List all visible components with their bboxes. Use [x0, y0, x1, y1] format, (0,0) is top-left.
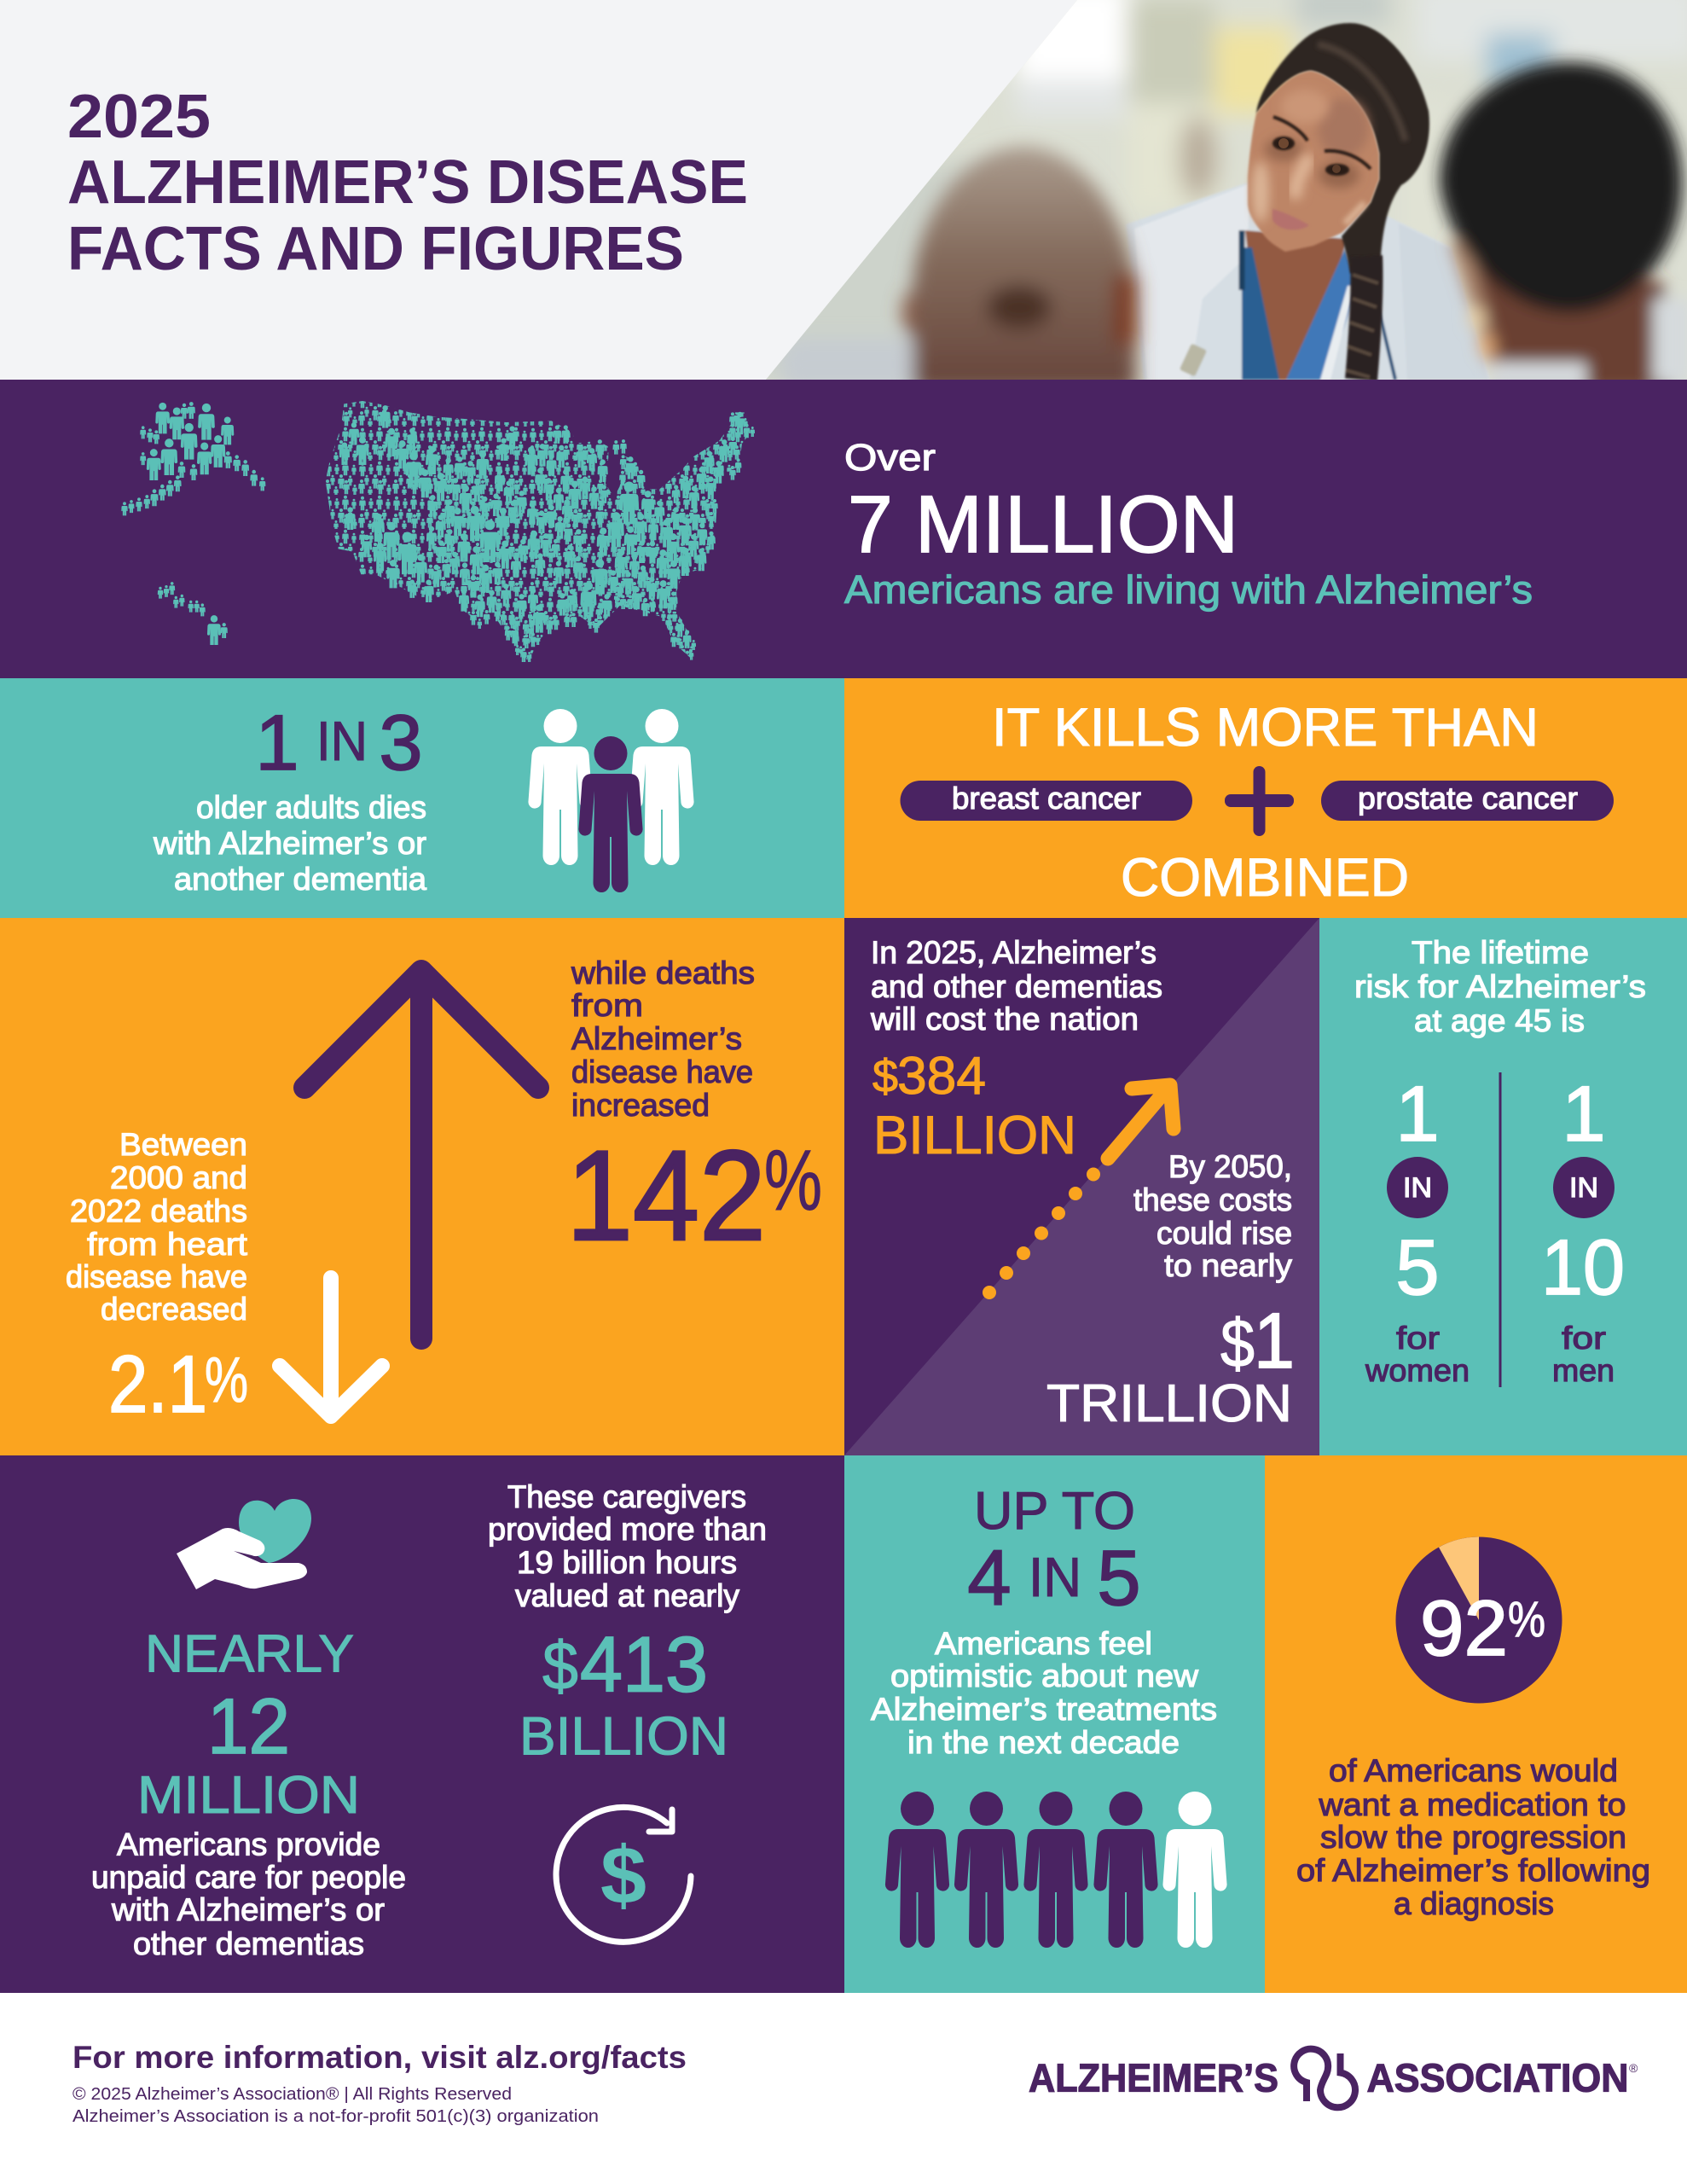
text: americans living: Americans are living with Alzheimer’s	[844, 567, 1533, 612]
text: lifetime risk: The lifetime	[1412, 935, 1589, 970]
text: older adults: older adults dies	[196, 790, 426, 825]
stat: 1 in 3	[255, 700, 423, 787]
arrow: down	[280, 1278, 382, 1416]
stat: $413 billion	[519, 1621, 728, 1766]
stat: 1 in 10 men: 10	[1541, 1224, 1625, 1311]
stat: 1 in 5 women	[1365, 1071, 1470, 1388]
stat: $413 billion: 413	[580, 1621, 708, 1708]
map: US made of people	[324, 392, 768, 670]
text: over: Over	[844, 437, 936, 479]
stat: 1 in 5 women: 5	[1395, 1224, 1440, 1311]
text: heart disease: 2022 deaths	[70, 1194, 247, 1228]
stat: $1 trillion: TRILLION	[1046, 1374, 1292, 1433]
text: americans provide: Americans provide	[117, 1827, 380, 1862]
text: heart disease: disease have	[66, 1259, 247, 1294]
panel: header	[0, 0, 1687, 392]
text: 2025 cost: will cost the nation	[870, 1002, 1139, 1037]
text: optimistic: optimistic about new	[890, 1658, 1198, 1693]
stat: 142%: %	[764, 1133, 822, 1228]
stat: 7 million: 7 MILLION	[848, 479, 1238, 570]
stat: 1 in 10 men	[1541, 1071, 1625, 1388]
text: these caregivers	[488, 1479, 767, 1613]
text: heart disease: from heart	[87, 1227, 248, 1262]
panel: deaths change	[0, 918, 844, 1455]
text: americans provide: with Alzheimer’s or	[111, 1892, 385, 1927]
title: FACTS AND FIGURES	[67, 215, 684, 283]
stat: nearly 12 million: NEARLY	[145, 1624, 354, 1684]
text: copyright: © 2025 Alzheimer’s Association® | All Rights Reserved	[72, 2085, 512, 2104]
text: these caregivers: provided more than	[488, 1512, 767, 1547]
stat: 1 in 10 men: men	[1552, 1353, 1615, 1388]
text: lifetime risk: risk for Alzheimer’s	[1354, 969, 1646, 1004]
stat: up to 4 in 5: 4	[967, 1535, 1012, 1622]
panel: cost	[844, 918, 1319, 1455]
text: alzheimer's deaths: while deaths	[571, 956, 755, 990]
text: older adults	[153, 790, 426, 897]
text: heart disease: 2000 and	[110, 1160, 247, 1195]
panel: 7 million	[0, 380, 1687, 678]
text: medication: slow the progression	[1320, 1820, 1626, 1855]
stat: up to 4 in 5: UP TO	[974, 1482, 1135, 1541]
chart: 92% pie: 92	[1420, 1585, 1508, 1672]
panel: footer	[0, 1993, 1687, 2184]
panel: 1 in 3	[0, 678, 844, 918]
logo: alzheimer's association	[1029, 2049, 1638, 2107]
stat: $1 trillion	[1046, 1298, 1295, 1433]
text: older adults: another dementia	[174, 862, 426, 897]
stat: 1 in 10 men: 1	[1562, 1071, 1606, 1158]
text: by 2050: these costs	[1133, 1182, 1292, 1217]
logo: alzheimer's association: ®	[1629, 2061, 1638, 2075]
text: alzheimer's deaths: increased	[571, 1088, 710, 1123]
stat: 1 in 3: 3	[379, 700, 423, 787]
text: americans provide: other dementias	[133, 1926, 364, 1961]
panel: lifetime risk	[1319, 918, 1687, 1455]
stat: 1 in 10 men: for	[1562, 1321, 1606, 1356]
stat: nearly 12 million: 12	[207, 1683, 290, 1770]
stat: nearly 12 million	[137, 1624, 360, 1825]
text: americans provide	[91, 1827, 406, 1961]
text: these caregivers: valued at nearly	[515, 1578, 739, 1613]
title: 2025	[67, 83, 211, 151]
chart: 92% pie: %	[1508, 1592, 1545, 1647]
icon: hand holding heart	[177, 1499, 311, 1589]
title	[67, 83, 748, 283]
text: heart disease	[66, 1127, 248, 1327]
doctor face	[1248, 71, 1379, 252]
text: medication: a diagnosis	[1394, 1886, 1554, 1921]
text: these caregivers: 19 billion hours	[517, 1545, 737, 1580]
text: medication	[1296, 1753, 1650, 1921]
arrow: dotted rise	[983, 1085, 1174, 1299]
text: copyright	[72, 2085, 599, 2126]
icon: plus	[1225, 766, 1294, 836]
heading: it kills more than: IT KILLS MORE THAN	[992, 698, 1539, 758]
stat: 1 in 3: IN	[316, 710, 368, 772]
text: optimistic: Americans feel	[935, 1626, 1152, 1661]
text: these caregivers: These caregivers	[507, 1479, 746, 1514]
text: optimistic	[871, 1626, 1217, 1760]
text: alzheimer's deaths: from	[571, 988, 643, 1023]
text: lifetime risk: at age 45 is	[1414, 1003, 1585, 1038]
stat: 1 in 3: 1	[255, 700, 299, 787]
patient left	[780, 147, 1138, 392]
text: more information: For more information, visit alz.org/facts	[72, 2040, 687, 2075]
text: copyright: Alzheimer’s Association is a not-for-profit 501(c)(3) organization	[72, 2107, 599, 2126]
panel: optimism	[844, 1455, 1265, 1993]
text: alzheimer's deaths: disease have	[571, 1054, 753, 1089]
stat: $384 billion: $	[872, 1051, 898, 1102]
stat: 1 in 5 women: 1	[1395, 1071, 1440, 1158]
stat: $1 trillion: 1	[1254, 1298, 1295, 1385]
pill: breast cancer: breast cancer	[952, 781, 1141, 816]
text: by 2050: could rise	[1157, 1216, 1292, 1251]
panel: caregivers	[0, 1455, 844, 1993]
text: alzheimer's deaths: Alzheimer’s	[571, 1021, 742, 1056]
text: optimistic: in the next decade	[907, 1725, 1180, 1760]
text: alzheimer's deaths	[571, 956, 755, 1123]
text: medication: of Americans would	[1329, 1753, 1618, 1788]
text: optimistic: Alzheimer’s treatments	[871, 1692, 1217, 1727]
stat: nearly 12 million: MILLION	[137, 1766, 360, 1825]
stat: 1 in 10 men: IN	[1569, 1172, 1598, 1203]
doctor braid	[1346, 256, 1378, 380]
stat: $384 billion: 384	[897, 1047, 986, 1106]
stat: up to 4 in 5: 5	[1097, 1535, 1141, 1622]
stat: 1 in 5 women: IN	[1403, 1172, 1432, 1203]
logo: alzheimer's association: ASSOCIATION	[1366, 2056, 1629, 2100]
text: medication: want a medication to	[1318, 1787, 1626, 1822]
text: 2025 cost: and other dementias	[871, 969, 1162, 1004]
text: 2025 cost	[870, 935, 1162, 1037]
icon: circular dollar: $	[600, 1830, 646, 1921]
patient right	[1440, 62, 1687, 392]
icon: circular dollar	[556, 1807, 691, 1942]
text: by 2050: By 2050,	[1168, 1149, 1292, 1184]
doctor hair	[1256, 23, 1429, 273]
text: older adults: with Alzheimer’s or	[153, 826, 426, 861]
panel: kills more than	[844, 678, 1687, 918]
stat: $413 billion: BILLION	[519, 1706, 728, 1766]
logo: alzheimer's association: ALZHEIMER’S	[1029, 2056, 1278, 2100]
icon: five people	[885, 1792, 1227, 1948]
title: ALZHEIMER’S DISEASE	[67, 148, 748, 217]
icon: three people	[528, 709, 694, 892]
stat: $413 billion: $	[542, 1628, 578, 1704]
stat: 142%: 142	[566, 1124, 766, 1267]
arrow: up	[304, 971, 538, 1339]
stat: 2.1%: 2.1	[108, 1339, 207, 1430]
stat: $1 trillion: $	[1220, 1305, 1255, 1381]
panel: medication	[1265, 1455, 1687, 1993]
text: heart disease: Between	[119, 1127, 247, 1162]
pill: prostate cancer: prostate cancer	[1358, 781, 1578, 816]
pill: prostate cancer	[1321, 781, 1614, 821]
photo: doctor talking with patients	[751, 0, 1687, 392]
stat: up to 4 in 5	[967, 1482, 1141, 1622]
text: medication: of Alzheimer’s following	[1296, 1853, 1650, 1888]
stat: 2.1%: %	[205, 1344, 248, 1415]
stat: $384 billion	[872, 1047, 1076, 1165]
text: 2025 cost: In 2025, Alzheimer’s	[871, 935, 1157, 970]
stat: $384 billion: BILLION	[873, 1106, 1076, 1165]
text: lifetime risk	[1354, 935, 1646, 1038]
chart: 92% pie	[1395, 1537, 1562, 1703]
stat: up to 4 in 5: IN	[1029, 1546, 1081, 1608]
text: by 2050	[1133, 1149, 1293, 1283]
heading: combined: COMBINED	[1121, 848, 1409, 908]
map: Alaska	[121, 402, 265, 515]
text: heart disease: decreased	[101, 1292, 247, 1327]
stat: 1 in 5 women: for	[1396, 1321, 1440, 1356]
text: by 2050: to nearly	[1164, 1248, 1293, 1283]
text: americans provide: unpaid care for people	[91, 1860, 406, 1895]
map: Hawaii	[158, 582, 228, 645]
doctor	[1126, 23, 1490, 380]
stat: 1 in 5 women: women	[1365, 1353, 1470, 1388]
pill: breast cancer	[901, 781, 1192, 821]
